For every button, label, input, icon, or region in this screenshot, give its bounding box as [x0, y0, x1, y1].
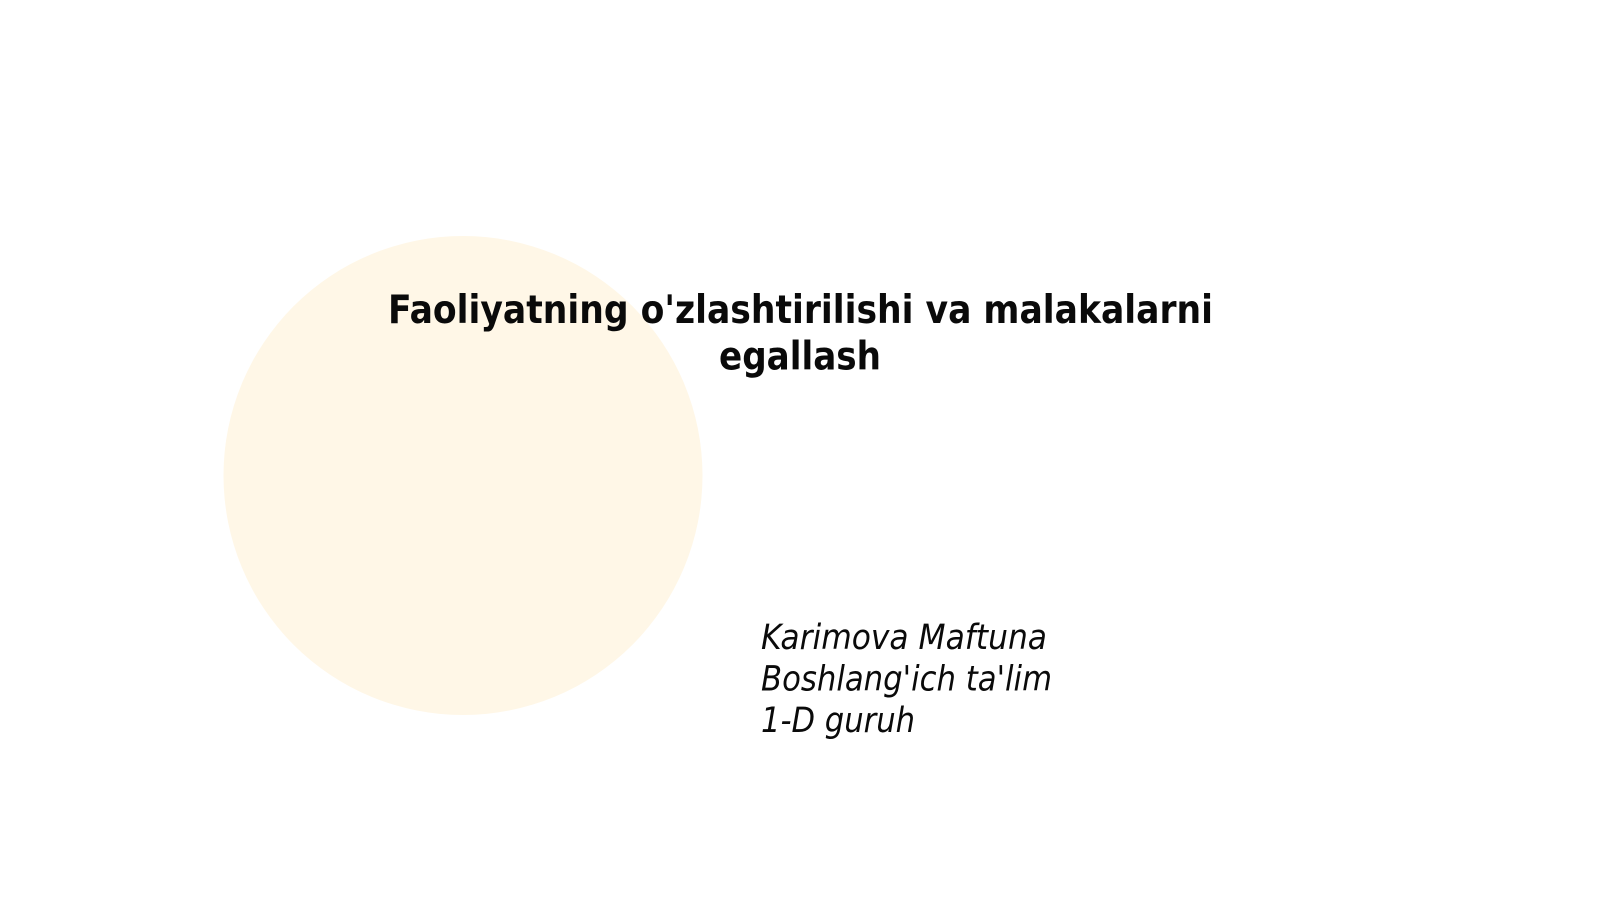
title — [388, 288, 1213, 380]
author details: Boshlang'ich ta'lim — [761, 660, 1052, 700]
author details: 1-D guruh — [761, 701, 915, 741]
author details — [761, 618, 1052, 741]
decorative cream circle — [224, 236, 702, 715]
author details: Karimova Maftuna — [761, 618, 1047, 658]
title: egallash — [719, 334, 881, 380]
title: Faoliyatning o'zlashtirilishi va malakalarni — [388, 288, 1213, 333]
